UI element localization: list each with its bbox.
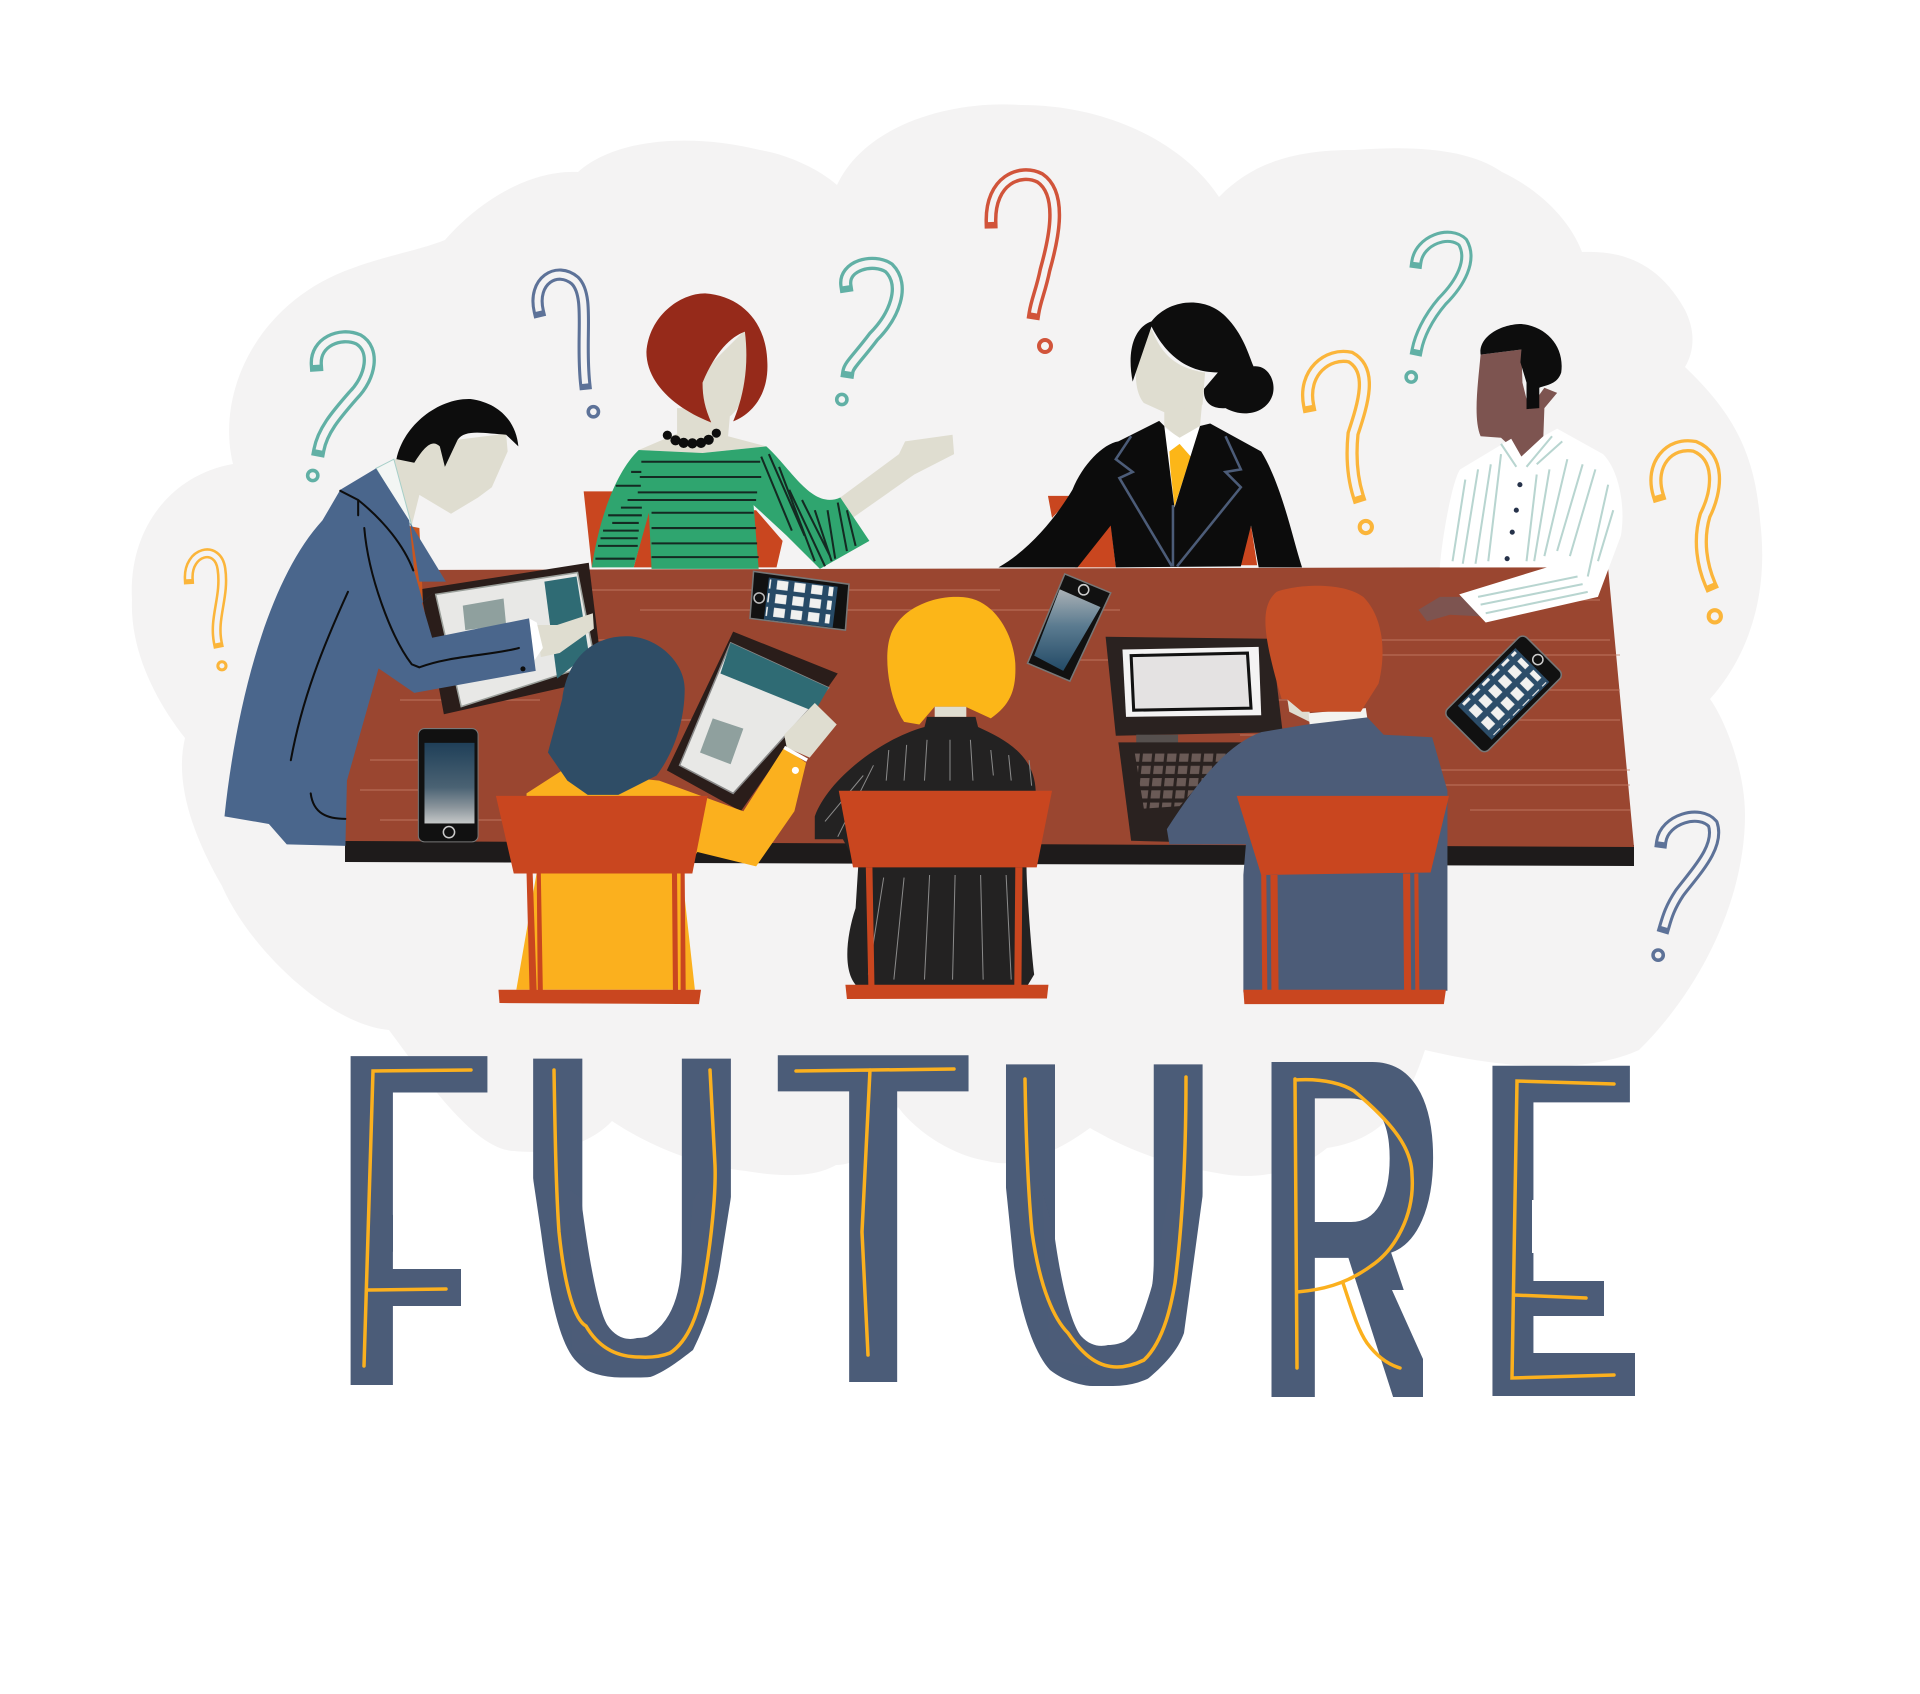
person: woman in yellow seen from behind xyxy=(496,636,837,1004)
tie xyxy=(1169,444,1191,507)
tablet: centre, held by woman in yellow xyxy=(667,632,838,811)
chair seat bar xyxy=(1243,990,1446,1004)
phone: right with icon grid xyxy=(1443,634,1564,754)
title: FUTURE lettering xyxy=(341,954,1640,1501)
laptop keyboard xyxy=(1118,742,1246,842)
tablet: left, held by man xyxy=(420,563,603,714)
pinstripes xyxy=(825,740,1032,980)
blue suit xyxy=(224,468,536,846)
cloud background xyxy=(132,104,1762,1176)
chair legs xyxy=(866,867,1022,987)
black hair and bun xyxy=(1131,302,1274,413)
red hair xyxy=(646,293,767,422)
letter R: R xyxy=(1261,958,1442,1501)
yellow top and arm xyxy=(516,747,806,990)
chair back xyxy=(1237,796,1449,875)
letters xyxy=(341,954,1634,1501)
hand on tablet xyxy=(784,703,837,758)
black jacket xyxy=(815,717,1036,987)
blue jacket xyxy=(1167,717,1447,992)
hinge xyxy=(1136,735,1178,745)
white shirt xyxy=(1440,429,1622,622)
black short hair xyxy=(1480,324,1562,409)
teal header xyxy=(720,643,829,712)
gray panel xyxy=(463,598,506,630)
question mark: teal left xyxy=(308,337,369,481)
orange hair xyxy=(1265,586,1383,712)
face and neck xyxy=(394,434,508,526)
tablet screen xyxy=(436,572,595,707)
yellow hair xyxy=(887,597,1015,724)
necklace xyxy=(663,429,721,448)
laptop xyxy=(1106,637,1283,842)
chair legs xyxy=(1261,873,1419,992)
person: woman in black suit xyxy=(998,302,1302,567)
letter U: U xyxy=(519,960,745,1471)
question mark: blue left xyxy=(538,275,598,417)
chair legs xyxy=(527,872,686,992)
shirt buttons xyxy=(1505,482,1522,561)
shirt cuff xyxy=(529,618,543,661)
neck and chest xyxy=(639,408,766,453)
neck xyxy=(935,707,966,717)
cuff xyxy=(784,747,807,760)
question mark: teal centre xyxy=(837,263,897,405)
letter F: F xyxy=(341,954,487,1487)
chair seat bar xyxy=(845,985,1048,999)
neck xyxy=(1164,398,1203,439)
table base xyxy=(345,838,1634,866)
teal panel xyxy=(544,577,589,679)
hand on tablet xyxy=(537,613,594,657)
question marks xyxy=(189,175,1721,960)
person: woman with red hair in green top xyxy=(584,293,954,569)
white collar xyxy=(1309,708,1367,726)
letter U: U xyxy=(992,965,1217,1480)
black hair xyxy=(396,399,518,467)
phone: top centre with icon grid xyxy=(750,571,849,630)
question mark: red top xyxy=(991,175,1055,352)
question mark: blue lower right xyxy=(1653,817,1714,960)
hand-cut adjustments to letter weight xyxy=(390,1178,1640,1400)
top stripes xyxy=(595,454,856,566)
dark skin head and neck xyxy=(1477,349,1557,457)
skin at neck xyxy=(1282,661,1310,722)
chair behind suit woman xyxy=(1048,496,1257,567)
face xyxy=(1136,329,1205,412)
hand on table xyxy=(1418,597,1481,621)
chair seat bar xyxy=(498,990,701,1004)
raised arm xyxy=(840,435,954,523)
shirt collar xyxy=(376,459,412,526)
question mark: teal right xyxy=(1406,237,1466,382)
black blazer xyxy=(998,421,1302,567)
shirt stripes xyxy=(1453,436,1613,613)
person: man in red tie and blue suit xyxy=(224,399,594,846)
person: man in white striped shirt xyxy=(1418,324,1622,622)
gray panel xyxy=(700,718,743,764)
letter T: T xyxy=(781,954,965,1483)
question mark: yellow centre right xyxy=(1308,356,1372,533)
suit lines xyxy=(291,491,519,819)
tablet screen xyxy=(680,643,829,793)
teal-blue hair xyxy=(548,636,685,795)
red tie xyxy=(407,526,423,602)
table top xyxy=(345,567,1634,847)
lapel lines xyxy=(1116,436,1241,566)
question mark: yellow far left xyxy=(189,553,226,670)
table xyxy=(345,567,1634,866)
green striped top xyxy=(592,446,869,569)
laptop lid xyxy=(1106,637,1283,736)
laptop screen xyxy=(1122,647,1261,717)
white shirt xyxy=(1162,426,1200,508)
person: red-haired man in blue jacket xyxy=(1167,586,1449,1004)
question mark: yellow far right xyxy=(1656,446,1721,622)
person: blond figure in black pinstripe jacket xyxy=(815,597,1052,999)
yellow inline strokes on lettering xyxy=(364,1069,1614,1378)
chair back xyxy=(839,791,1052,867)
letter E: E xyxy=(1484,963,1634,1498)
chair back xyxy=(496,796,708,873)
face xyxy=(697,329,749,416)
phone: bottom left xyxy=(418,729,478,842)
chair behind woman xyxy=(584,491,783,567)
phone: top right of centre xyxy=(1028,574,1111,681)
wood grain xyxy=(360,590,1630,820)
